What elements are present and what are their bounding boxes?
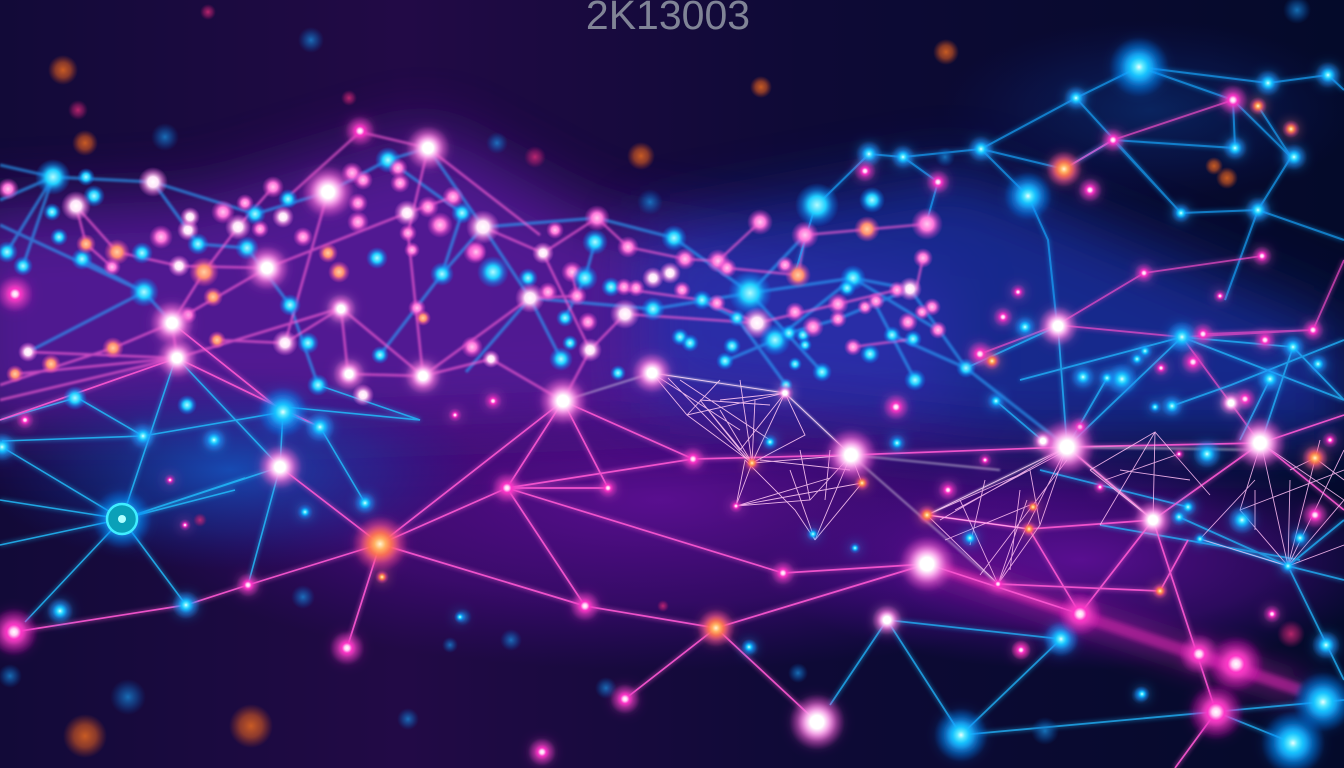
upper right cyan links	[795, 67, 1344, 325]
right side cyan links	[830, 326, 1344, 743]
lower pink network links	[0, 323, 1344, 768]
glowing pink band	[930, 565, 1300, 690]
bright white and orange hub nodes	[150, 97, 1328, 647]
soft nodes in upper band	[0, 147, 976, 415]
lower left cyan links	[0, 358, 420, 622]
mesh highlight lines	[563, 373, 1261, 584]
upper band thick blue links	[0, 148, 1067, 447]
upper band pink links	[0, 132, 927, 401]
teal ring of main cyan hub	[107, 504, 137, 534]
mesh cluster: centre	[652, 373, 862, 540]
mesh cluster: lower right	[927, 432, 1344, 584]
thick pink beam	[940, 568, 1300, 690]
upper right pink links	[980, 100, 1344, 443]
